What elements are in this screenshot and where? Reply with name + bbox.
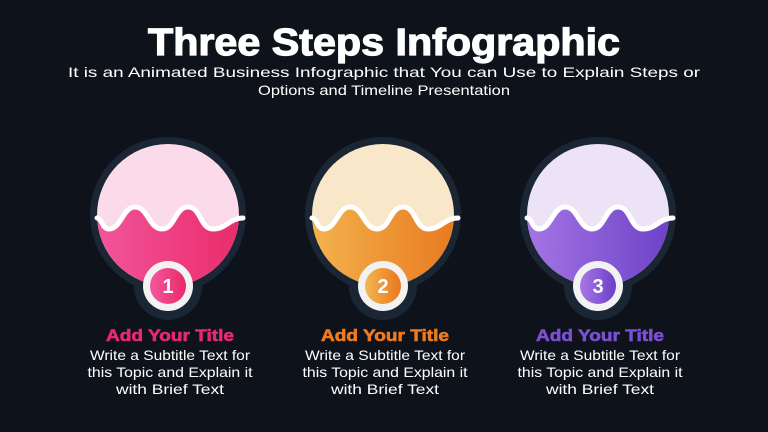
text: step 3: with Brief Text <box>545 381 654 397</box>
text: step 1: Write a Subtitle Text for <box>90 347 250 363</box>
subtitle <box>68 64 700 98</box>
text: step 3: Write a Subtitle Text for <box>520 347 680 363</box>
text: step 2: this Topic and Explain it <box>302 364 468 380</box>
text: step 2 <box>302 326 468 397</box>
step 2 <box>303 135 463 320</box>
step 1 <box>88 135 248 320</box>
subtitle: Options and Timeline Presentation <box>258 82 510 98</box>
icon: circle with wave 1 <box>88 135 248 320</box>
text: step 1 <box>88 326 253 397</box>
text: step 3 <box>518 326 683 397</box>
badge 3 <box>573 261 623 311</box>
badge 3: 3 <box>592 276 604 298</box>
text: step 1: Add Your Title <box>106 326 234 345</box>
title: Three Steps Infographic <box>148 22 620 64</box>
text: step 2: Add Your Title <box>321 326 449 345</box>
badge 1 <box>143 261 193 311</box>
step 3 <box>518 135 678 320</box>
icon: circle with wave 2 <box>303 135 463 320</box>
text: step 3: Add Your Title <box>536 326 664 345</box>
icon: circle with wave 3 <box>518 135 678 320</box>
text: step 2: with Brief Text <box>330 381 439 397</box>
text: step 3: this Topic and Explain it <box>518 364 683 380</box>
badge 1: 1 <box>162 276 174 298</box>
text: step 1: with Brief Text <box>115 381 224 397</box>
badge 2: 2 <box>377 276 389 298</box>
text: step 2: Write a Subtitle Text for <box>305 347 465 363</box>
text: step 1: this Topic and Explain it <box>88 364 253 380</box>
badge 2 <box>358 261 408 311</box>
subtitle: It is an Animated Business Infographic that You can Use to Explain Steps or <box>68 64 700 80</box>
